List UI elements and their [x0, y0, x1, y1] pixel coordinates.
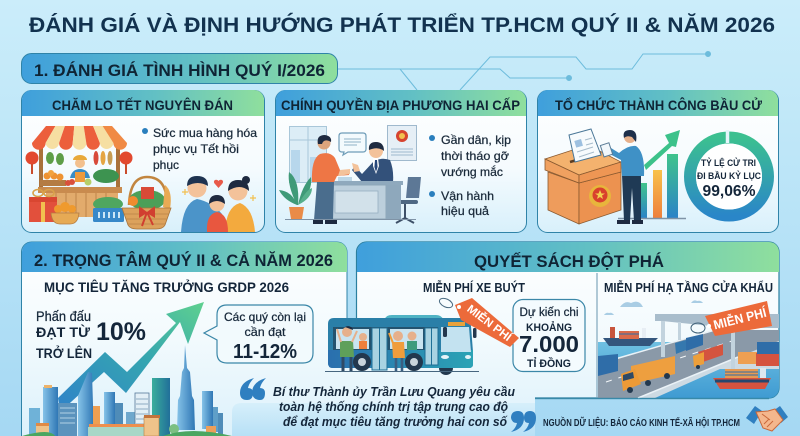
- callout 11-12%: cần đạt: [244, 325, 286, 339]
- callout 7.000 tỉ đồng: KHOẢNG: [526, 321, 572, 334]
- price tag: port: [691, 301, 772, 336]
- bottom edge shadow: [535, 398, 769, 400]
- quote text: Bí thư Thành ủy Trần Lưu Quang yêu cầu: [273, 384, 515, 399]
- closing quote mark: [511, 411, 536, 432]
- panel: Chính quyền địa phương hai cấp: [276, 90, 526, 232]
- icon: desk: [331, 177, 403, 219]
- growth arrow: [58, 302, 204, 412]
- icon: gift box: [29, 190, 57, 222]
- bullet text: Gần dân, kịp: [441, 133, 511, 147]
- opening quote mark: [240, 378, 266, 400]
- bullet text: phục: [153, 158, 179, 172]
- bullet text: thời tháo gỡ: [441, 149, 509, 163]
- quote text: toàn hệ thống chính trị tập trung cao độ: [279, 399, 508, 414]
- icon: window: [290, 126, 326, 182]
- target 10%: TRỞ LÊN: [36, 346, 92, 361]
- panel: Chăm lo Tết Nguyên Đán: [22, 90, 264, 232]
- quote text: để đạt mục tiêu tăng trưởng hai con số: [283, 414, 508, 429]
- donut label: [697, 157, 761, 200]
- callout 7.000 tỉ đồng: TỈ ĐỒNG: [527, 357, 571, 370]
- callout 7.000 tỉ đồng: [513, 300, 585, 372]
- card heading: CHÍNH QUYỀN ĐỊA PHƯƠNG HAI CẤP: [281, 97, 520, 113]
- target 10%: Phấn đấu: [36, 309, 91, 324]
- price tag: bus: MIỄN PHÍ: [464, 302, 514, 345]
- section 1 heading pill: 1. ĐÁNH GIÁ TÌNH HÌNH QUÝ I/2026: [34, 61, 325, 80]
- donut label: ĐI BẦU KỶ LỤC: [697, 170, 761, 181]
- card heading: TỔ CHỨC THÀNH CÔNG BẦU CỬ: [555, 96, 762, 113]
- card heading: CHĂM LO TẾT NGUYÊN ĐÁN: [52, 96, 233, 113]
- price tag: bus: [438, 296, 519, 347]
- icon: family: [181, 176, 256, 232]
- target 10%: 10%: [96, 318, 146, 346]
- panel: Trọng tâm quý II & cả năm 2026: [22, 242, 779, 436]
- icon: document with emblem: [388, 126, 416, 160]
- target 10%: [36, 309, 146, 361]
- callout 11-12%: Các quý còn lại: [224, 310, 306, 324]
- icon: citizen: [312, 135, 350, 224]
- icon: fruit bowl: [51, 202, 79, 224]
- GRDP subheading: MỤC TIÊU TĂNG TRƯỞNG GRDP 2026: [44, 278, 289, 295]
- bullet text: hiệu quả: [441, 204, 489, 218]
- bullet text: Vận hành: [441, 189, 494, 203]
- bullet text: Sức mua hàng hóa: [153, 126, 257, 140]
- bullet text: [142, 126, 257, 172]
- icon: ballot box: [545, 145, 621, 224]
- bullet text: phục vụ Tết hồi: [153, 142, 239, 156]
- icon: bus: [325, 315, 479, 375]
- bar chart: [618, 130, 686, 218]
- donut label: 99,06%: [702, 183, 756, 200]
- bullet text: vướng mắc: [441, 164, 503, 179]
- section 1 heading pill: [22, 54, 338, 84]
- quote block: [232, 378, 536, 436]
- icon: vegetable basket: [93, 197, 124, 222]
- quote text: [273, 384, 515, 429]
- circuit lines decoration: [338, 52, 710, 90]
- callout 7.000 tỉ đồng: Dự kiến chi: [520, 307, 578, 319]
- source note: NGUỒN DỮ LIỆU: BÁO CÁO KINH TẾ-XÃ HỘI TP.HCM: [543, 416, 740, 429]
- icon: ballot paper: [569, 129, 601, 162]
- city skyline: [22, 345, 232, 436]
- divider: [596, 273, 598, 398]
- icon: office chair: [393, 177, 421, 223]
- port illustration: [598, 300, 779, 398]
- panel: Tổ chức thành công bầu cử: [538, 90, 778, 232]
- icon: market stall: [26, 126, 132, 217]
- title: ĐÁNH GIÁ VÀ ĐỊNH HƯỚNG PHÁT TRIỂN TP.HCM QUÝ II & NĂM 2026: [29, 12, 775, 37]
- icon: gift basket: [122, 177, 171, 229]
- port subheading: MIỄN PHÍ HẠ TẦNG CỬA KHẨU: [604, 280, 773, 295]
- target 10%: ĐẠT TỪ: [36, 325, 91, 340]
- callout 11-12%: 11-12%: [233, 341, 297, 363]
- bullet text: [429, 133, 511, 218]
- section heading: 2. TRỌNG TÂM QUÝ II & CẢ NĂM 2026: [34, 251, 333, 270]
- icon: official: [352, 142, 393, 182]
- donut chart 99,06%: [690, 130, 768, 216]
- section heading: QUYẾT SÁCH ĐỘT PHÁ: [474, 252, 664, 271]
- panel: Quyết sách đột phá: [325, 242, 779, 398]
- icon: speech bubble: [339, 133, 366, 155]
- icon: voter: [600, 130, 644, 224]
- donut label: TỶ LỆ CỬ TRI: [701, 157, 756, 168]
- price tag: port: MIỄN PHÍ: [712, 305, 768, 332]
- icon: plant: [279, 172, 312, 219]
- bus subheading: MIỄN PHÍ XE BUÝT: [423, 280, 525, 295]
- callout 11-12%: [204, 305, 313, 363]
- icon: handshake: [746, 406, 788, 431]
- callout 7.000 tỉ đồng: 7.000: [519, 331, 579, 357]
- floor: [285, 218, 416, 220]
